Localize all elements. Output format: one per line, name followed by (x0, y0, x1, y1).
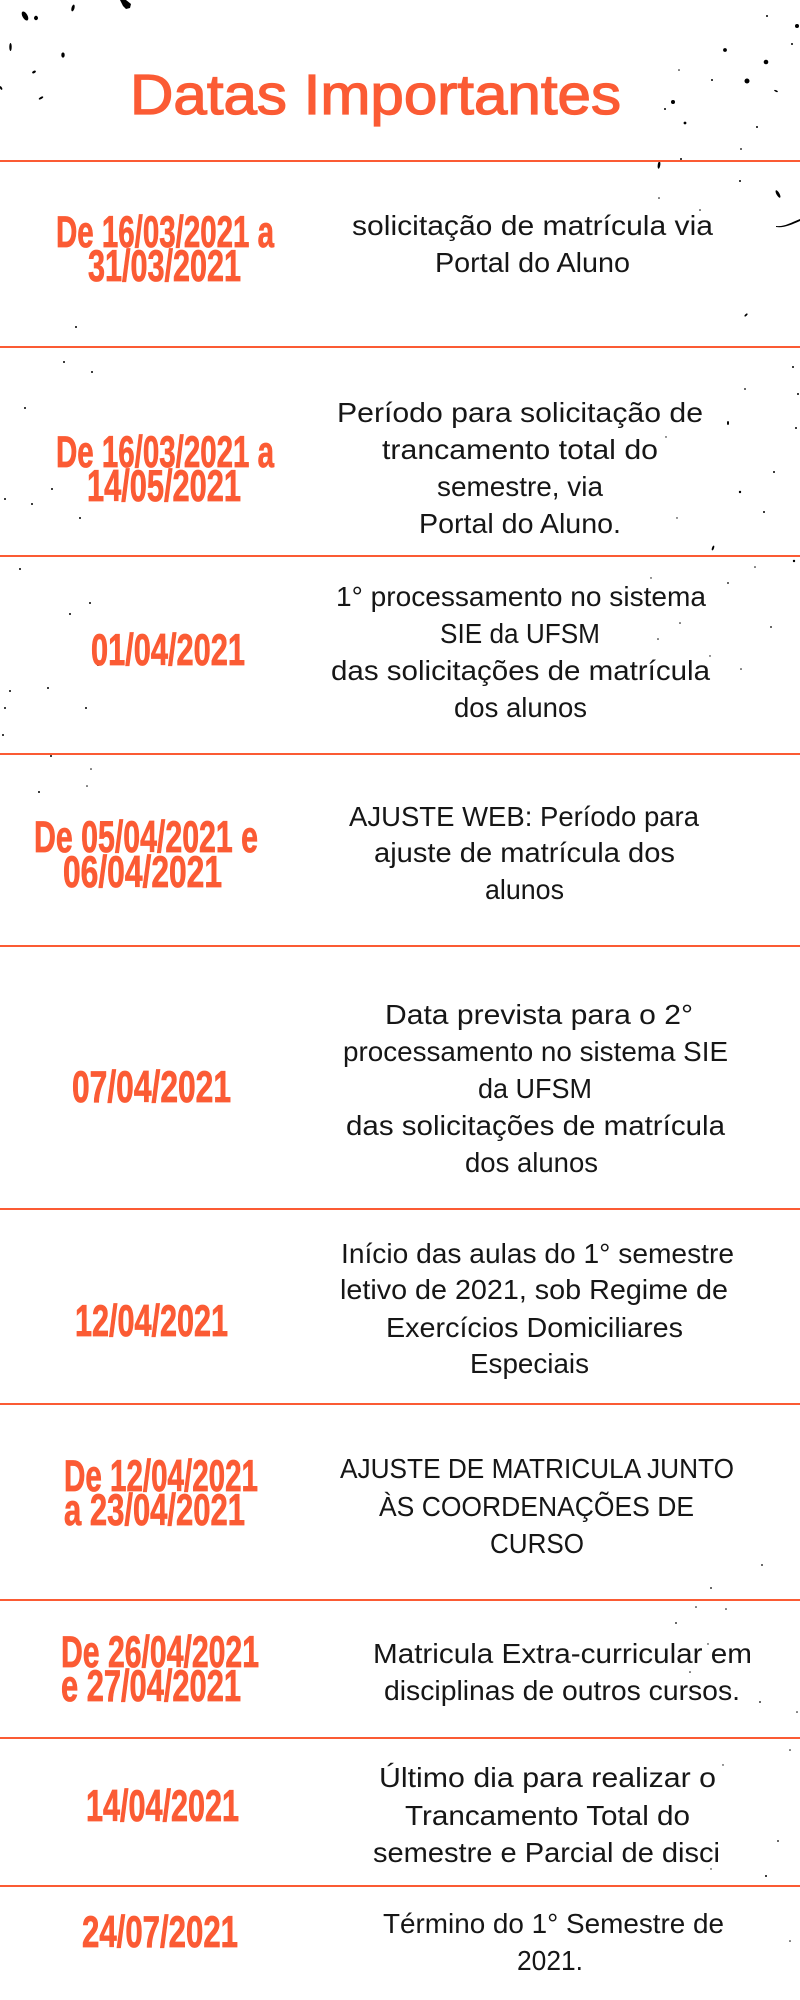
date: 12/04/2021 (75, 1297, 228, 1346)
description: AJUSTE DE MATRICULA JUNTO (340, 1453, 734, 1484)
date: De 16/03/2021 a (56, 428, 275, 477)
description: Data prevista para o 2° (385, 999, 693, 1030)
description (331, 581, 710, 723)
description: alunos (485, 874, 564, 905)
date: De 05/04/2021 e (34, 813, 258, 862)
row 9 (86, 1762, 720, 1868)
description: Matricula Extra-curricular em (373, 1638, 752, 1669)
description: Último dia para realizar o (379, 1762, 716, 1793)
description: CURSO (490, 1528, 584, 1559)
description: solicitação de matrícula via (352, 210, 713, 241)
description: Trancamento Total do (405, 1800, 690, 1831)
row 1 (56, 208, 713, 291)
description: das solicitações de matrícula (346, 1110, 725, 1141)
description: das solicitações de matrícula (331, 655, 710, 686)
title: Datas Importantes (130, 63, 621, 127)
description: letivo de 2021, sob Regime de (340, 1274, 728, 1305)
description: Início das aulas do 1° semestre (341, 1238, 734, 1269)
description: Término do 1° Semestre de (383, 1908, 724, 1939)
row 6 (75, 1238, 734, 1379)
date: De 12/04/2021 (64, 1452, 258, 1501)
description: Período para solicitação de (337, 397, 703, 428)
description: 2021. (517, 1945, 583, 1976)
description (349, 801, 699, 905)
description: ÀS COORDENAÇÕES DE (379, 1491, 694, 1522)
date (56, 428, 275, 511)
description (373, 1638, 752, 1706)
description: ajuste de matrícula dos (374, 837, 675, 868)
date: 06/04/2021 (63, 848, 222, 897)
description: semestre, via (437, 471, 603, 502)
date (64, 1452, 258, 1535)
date: 31/03/2021 (88, 242, 241, 291)
description: SIE da UFSM (440, 618, 600, 649)
row 10 (82, 1908, 724, 1976)
date: e 27/04/2021 (61, 1662, 241, 1711)
description: Exercícios Domiciliares (386, 1312, 683, 1343)
description: 1° processamento no sistema (336, 581, 706, 612)
row 3 (91, 581, 710, 723)
date: 24/07/2021 (82, 1908, 238, 1957)
description: Especiais (470, 1348, 589, 1379)
description: processamento no sistema SIE (343, 1036, 728, 1067)
description (383, 1908, 724, 1976)
row 5 (72, 999, 728, 1178)
description: Portal do Aluno (435, 247, 630, 278)
description: dos alunos (454, 692, 587, 723)
description (373, 1762, 720, 1868)
description: semestre e Parcial de disci (373, 1837, 720, 1868)
date: 07/04/2021 (72, 1063, 231, 1112)
date: a 23/04/2021 (64, 1486, 245, 1535)
date: De 16/03/2021 a (56, 208, 275, 257)
date (34, 813, 258, 897)
date (61, 1628, 259, 1711)
description: AJUSTE WEB: Período para (349, 801, 699, 832)
description (337, 397, 703, 539)
row 4 (34, 801, 699, 905)
description: trancamento total do (382, 434, 658, 465)
date: 01/04/2021 (91, 626, 245, 675)
description: da UFSM (478, 1073, 592, 1104)
description (352, 210, 713, 278)
description: dos alunos (465, 1147, 598, 1178)
description (340, 1238, 734, 1379)
date: De 26/04/2021 (61, 1628, 259, 1677)
date: 14/05/2021 (87, 462, 241, 511)
date (56, 208, 275, 291)
date: 14/04/2021 (86, 1782, 239, 1831)
row 7 (64, 1452, 734, 1559)
description (343, 999, 728, 1178)
description: Portal do Aluno. (419, 508, 621, 539)
description (340, 1453, 734, 1559)
row 2 (56, 397, 703, 539)
row 8 (61, 1628, 752, 1711)
description: disciplinas de outros cursos. (384, 1675, 740, 1706)
